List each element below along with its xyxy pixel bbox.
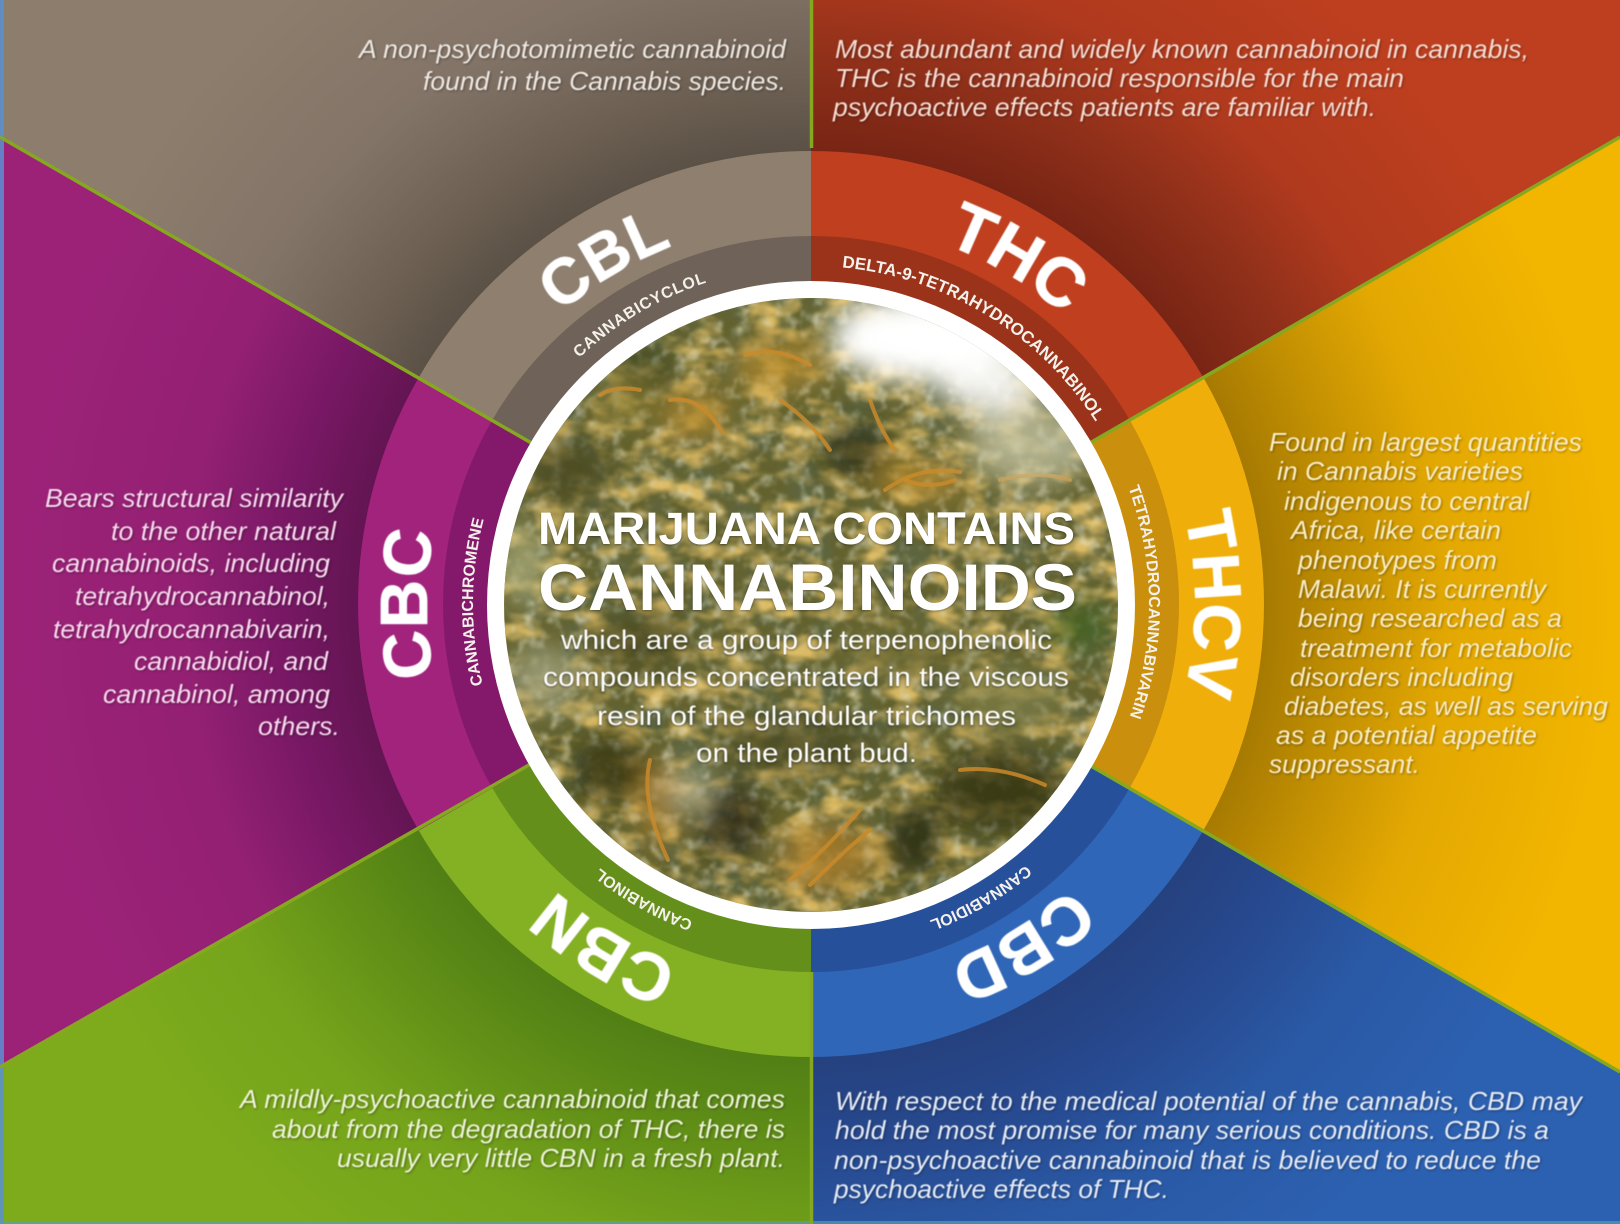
text block: THCV description: indigenous to central	[1284, 486, 1530, 516]
text block: CBC description: to the other natural	[111, 516, 337, 546]
text block: CBC description: tetrahydrocannabivarin,	[53, 614, 330, 644]
text block: CBN description: about from the degradation of THC, there is	[272, 1114, 785, 1144]
text block: THC description	[832, 34, 1529, 122]
text block: THCV description: Malawi. It is currently	[1298, 574, 1548, 604]
center description: compounds concentrated in the viscous	[543, 662, 1069, 692]
panel: THC background wedge	[811, 0, 1620, 604]
ring label: CBC: CBC	[380, 528, 432, 678]
text block: CBC description: Bears structural similarity	[45, 483, 345, 513]
heading line: Cannabinoids: CANNABINOIDS	[538, 550, 1077, 624]
text block: THCV description: being researched as a	[1298, 603, 1562, 633]
ring sublabel: Delta-9-Tetrahydrocannabinol: DELTA-9-TETRAHYDROCANNABINOL	[843, 256, 1102, 422]
text block: THCV description: treatment for metabolic	[1300, 633, 1572, 663]
text block: THCV description: diabetes, as well as serving	[1284, 691, 1609, 721]
ring segment: CBC	[358, 378, 811, 830]
text block: THC description: psychoactive effects patients are familiar with.	[832, 92, 1376, 122]
ring segment: THC	[811, 151, 1203, 604]
ring segment: CBD	[811, 604, 1203, 1057]
text block: CBC description: cannabidiol, and	[134, 646, 330, 676]
text block: THCV description: Africa, like certain	[1289, 515, 1501, 545]
text block: CBL description: found in the Cannabis species.	[423, 66, 786, 96]
ring segment: CBN	[419, 604, 811, 1057]
ring label: CBD: CBD	[956, 896, 1092, 998]
ring sublabel: Cannabicyclol: CANNABICYCLOL	[574, 274, 706, 356]
text block: THC description: THC is the cannabinoid responsible for the main	[835, 63, 1404, 93]
text block: THCV description: phenotypes from	[1297, 545, 1497, 575]
text block: CBN description: usually very little CBN in a fresh plant.	[337, 1143, 785, 1173]
text block: CBL description	[357, 34, 788, 96]
white circle frame	[487, 281, 1135, 929]
photo: cannabis bud	[500, 294, 1120, 915]
text block: THCV description: Found in largest quantities	[1269, 427, 1582, 457]
ring segment: THCV	[811, 378, 1264, 830]
ring label: THCV: THCV	[1186, 506, 1242, 702]
text block: CBN description: A mildly-psychoactive cannabinoid that comes	[238, 1084, 785, 1114]
text block: CBC description: cannabinol, among	[103, 679, 331, 709]
center description	[543, 625, 1069, 768]
ring sublabel: Cannabidiol: CANNABIDIOL	[930, 867, 1030, 929]
ring label: CBL: CBL	[542, 214, 672, 304]
heading line: Marijuana Contains: MARIJUANA CONTAINS	[538, 503, 1075, 554]
text block: THCV description: as a potential appetite	[1276, 720, 1537, 750]
text block: CBD description	[833, 1086, 1584, 1204]
ring label: CBN: CBN	[528, 892, 671, 1002]
text block: THCV description	[1269, 427, 1609, 779]
text block: CBN description	[238, 1084, 785, 1173]
text block: CBD description: With respect to the medical potential of the cannabis, CBD may	[835, 1086, 1584, 1116]
text block: THCV description: suppressant.	[1269, 749, 1420, 779]
text block: CBL description: A non-psychotomimetic cannabinoid	[357, 34, 788, 64]
ring label: THC: THC	[958, 200, 1086, 308]
ring sublabel: Cannabinol: CANNABINOL	[598, 868, 692, 930]
text block: THC description: Most abundant and widely known cannabinoid in cannabis,	[835, 34, 1529, 64]
text block: THCV description: disorders including	[1290, 662, 1514, 692]
text block: CBC description: others.	[258, 711, 340, 741]
text block: THCV description: in Cannabis varieties	[1277, 456, 1523, 486]
text block: CBD description: hold the most promise for many serious conditions. CBD is a	[835, 1115, 1549, 1145]
panel: CBC background wedge	[0, 137, 811, 1067]
panel: CBL background wedge	[0, 0, 811, 604]
ring segment: CBL	[419, 151, 811, 604]
center description: on the plant bud.	[696, 738, 917, 768]
text block: CBC description: tetrahydrocannabinol,	[75, 581, 330, 611]
text block: CBD description: non-psychoactive cannabinoid that is believed to reduce the	[834, 1145, 1541, 1175]
panel: CBD background wedge	[811, 604, 1620, 1224]
text block: CBD description: psychoactive effects of THC.	[833, 1174, 1169, 1204]
text block: CBC description	[45, 483, 345, 741]
panel: THCV background wedge	[811, 137, 1620, 1072]
panel: CBN background wedge	[0, 604, 811, 1224]
center heading	[538, 503, 1077, 624]
center description: which are a group of terpenophenolic	[560, 625, 1052, 655]
ring sublabel: Tetrahydrocannabivarin: TETRAHYDROCANNABIVARIN	[1130, 484, 1160, 720]
center description: resin of the glandular trichomes	[597, 701, 1016, 731]
ring sublabel: Cannabichromene: CANNABICHROMENE	[462, 518, 484, 686]
text block: CBC description: cannabinoids, including	[52, 548, 331, 578]
